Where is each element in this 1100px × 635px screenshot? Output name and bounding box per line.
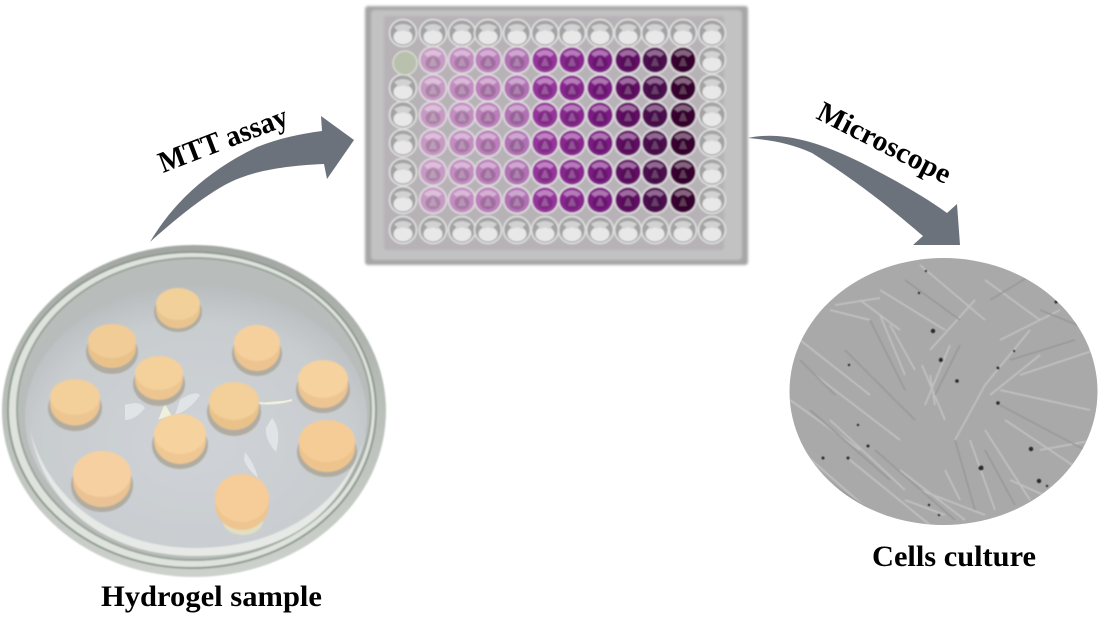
hydrogel discs [48, 288, 357, 535]
label: Microscope: Microscope [812, 96, 957, 191]
label: MTT assay: MTT assay [154, 100, 292, 180]
arrow: sample to MTT plate [150, 116, 354, 242]
micrograph disc [790, 258, 1098, 525]
arrow: plate to microscope [748, 136, 960, 245]
label: Cells culture: Cells culture [872, 540, 1036, 573]
panel: 96-well MTT plate photo [365, 6, 748, 265]
cell streaks and debris [790, 265, 1095, 525]
panel: cell culture micrograph [790, 258, 1098, 525]
label: Hydrogel sample: Hydrogel sample [101, 580, 322, 613]
plate body [365, 6, 748, 265]
well grid [389, 19, 726, 244]
panel: petri dish with hydrogel samples [2, 245, 386, 577]
glass dish [2, 245, 386, 577]
water traces [125, 393, 278, 478]
